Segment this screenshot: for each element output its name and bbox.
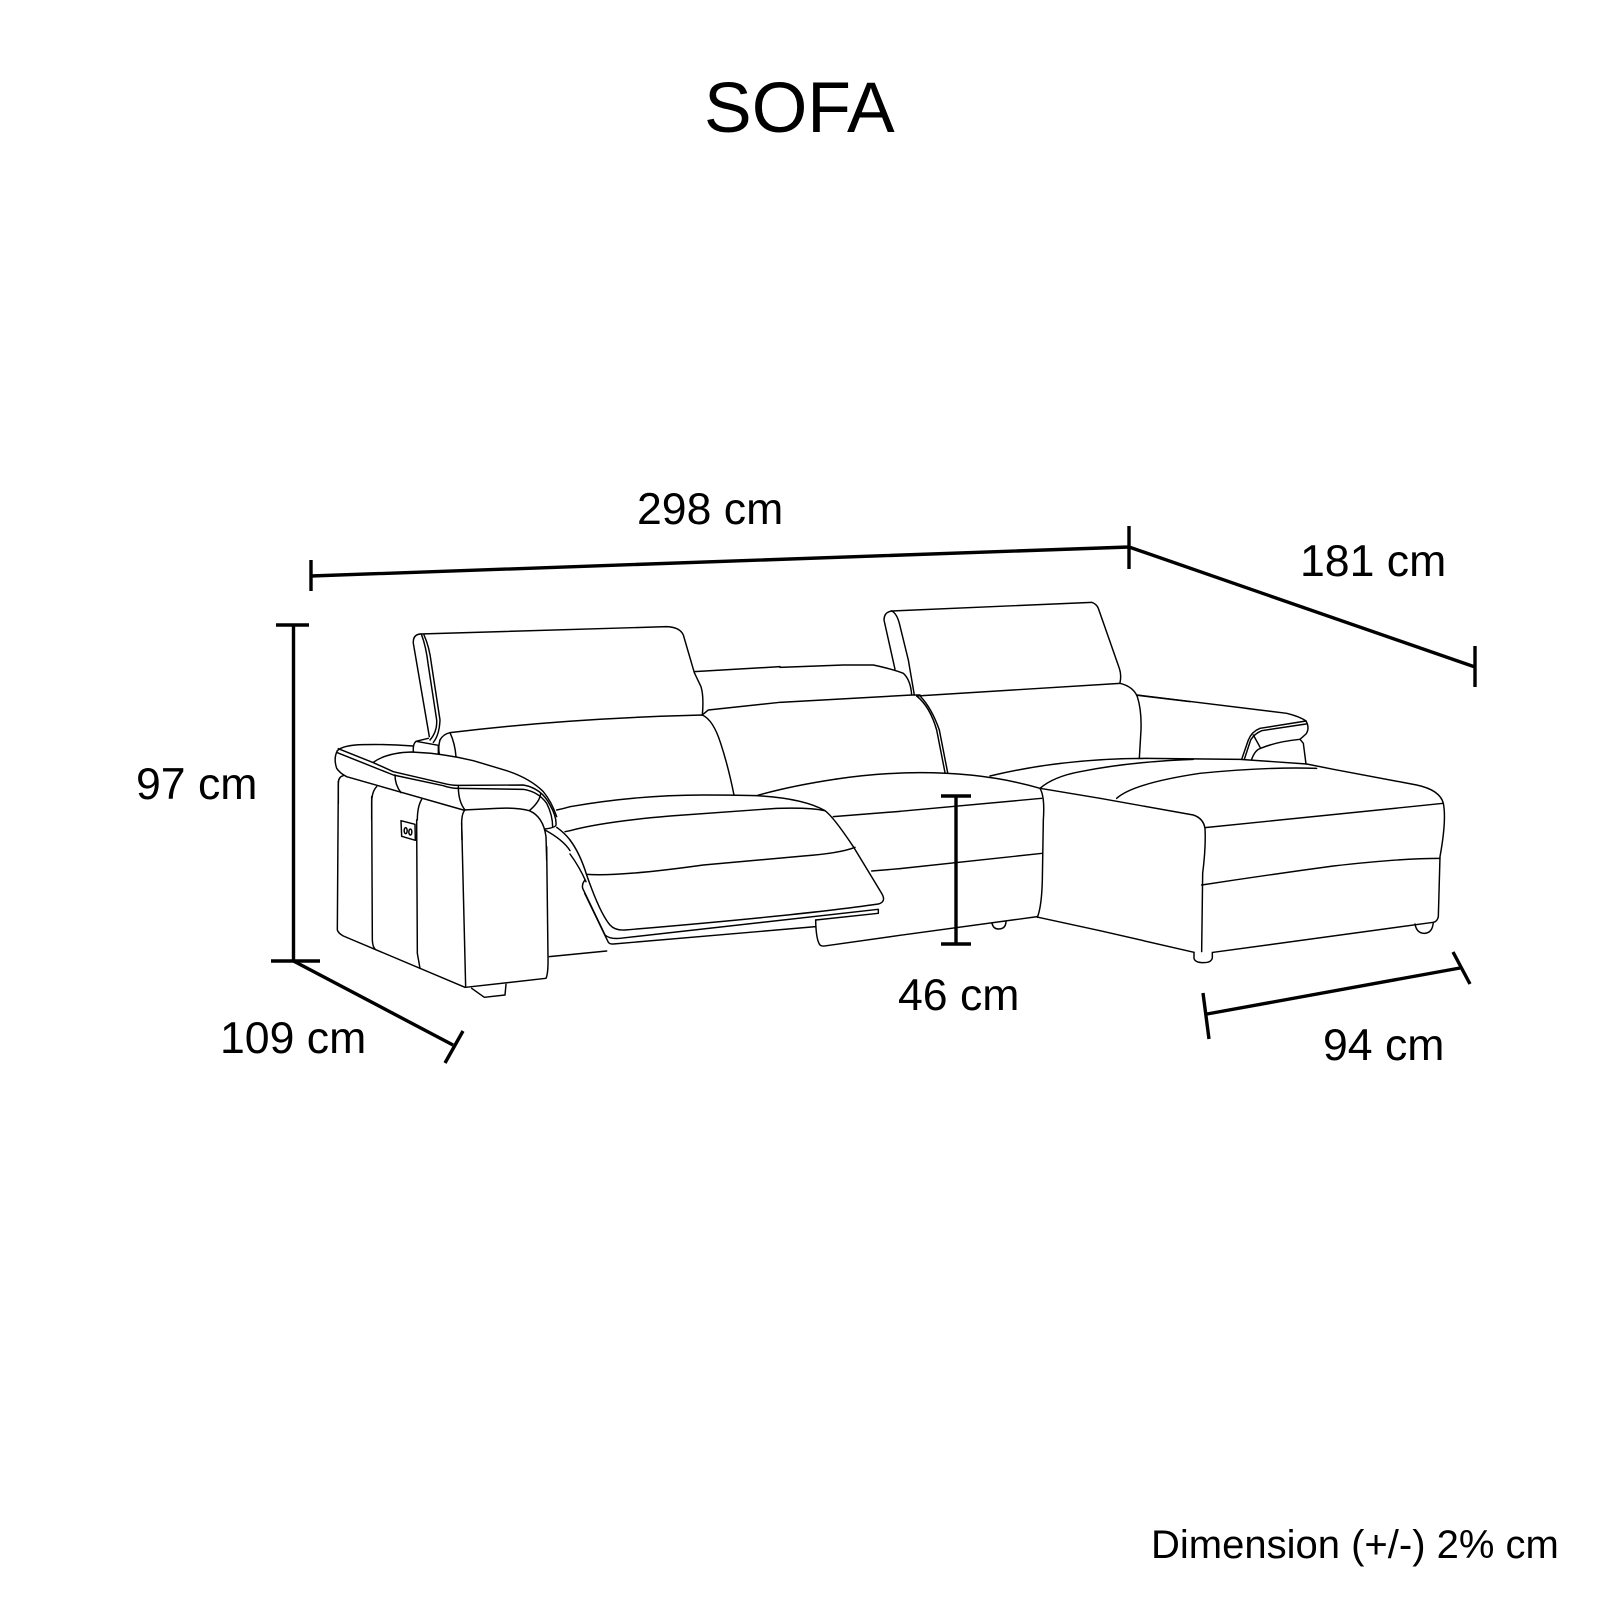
middle back top — [694, 667, 780, 715]
label: 298 cm: 298 cm — [637, 485, 783, 534]
chaise corner — [1100, 798, 1205, 952]
right arm — [1137, 695, 1308, 764]
right back cushion — [917, 683, 1141, 758]
right section: chaise — [1100, 695, 1444, 963]
recliner switch — [401, 821, 415, 840]
dimension line: overall width — [311, 526, 1129, 591]
chaise back and inner seat — [990, 758, 1193, 788]
chaise seams — [1202, 803, 1443, 885]
dimension line: seat height — [941, 796, 971, 944]
right arm back line — [1137, 695, 1190, 702]
title: SOFA — [704, 68, 895, 148]
dimension line: chaise width — [1203, 952, 1470, 1039]
chaise left corner and base — [1038, 788, 1100, 931]
left arm side panels — [337, 782, 465, 987]
label: 109 cm: 109 cm — [220, 1014, 366, 1063]
arm front — [462, 823, 548, 987]
dimension line: depth left — [294, 961, 463, 1063]
front base line — [549, 951, 607, 957]
left arm top and switch — [335, 738, 557, 860]
middle seat — [837, 773, 1044, 935]
label: 94 cm: 94 cm — [1323, 1021, 1444, 1070]
left headrest — [413, 627, 703, 742]
centre section: middle seat, right headrest — [780, 602, 1193, 935]
middle back cushion edge — [780, 695, 920, 702]
recliner seat and footrest — [570, 779, 900, 946]
label: 181 cm: 181 cm — [1300, 537, 1446, 586]
label: 46 cm: 46 cm — [898, 971, 1019, 1020]
middle back top — [780, 665, 912, 695]
left foot — [472, 984, 506, 997]
left section: recliner, arm and left headrest — [337, 627, 780, 997]
dimension line: depth right — [1129, 547, 1475, 687]
headrest bracket — [413, 738, 438, 754]
note: dimension tolerance: Dimension (+/-) 2% cm — [1151, 1523, 1559, 1567]
chaise seat top — [1117, 758, 1444, 952]
right headrest — [884, 602, 1121, 695]
sofa line drawing — [335, 602, 1444, 997]
cushion divider — [917, 696, 948, 773]
chaise feet — [1194, 922, 1433, 963]
label: 97 cm: 97 cm — [136, 760, 257, 809]
seat start lines — [545, 807, 570, 851]
dimension line: height — [271, 625, 320, 961]
left back cushion — [439, 715, 734, 795]
